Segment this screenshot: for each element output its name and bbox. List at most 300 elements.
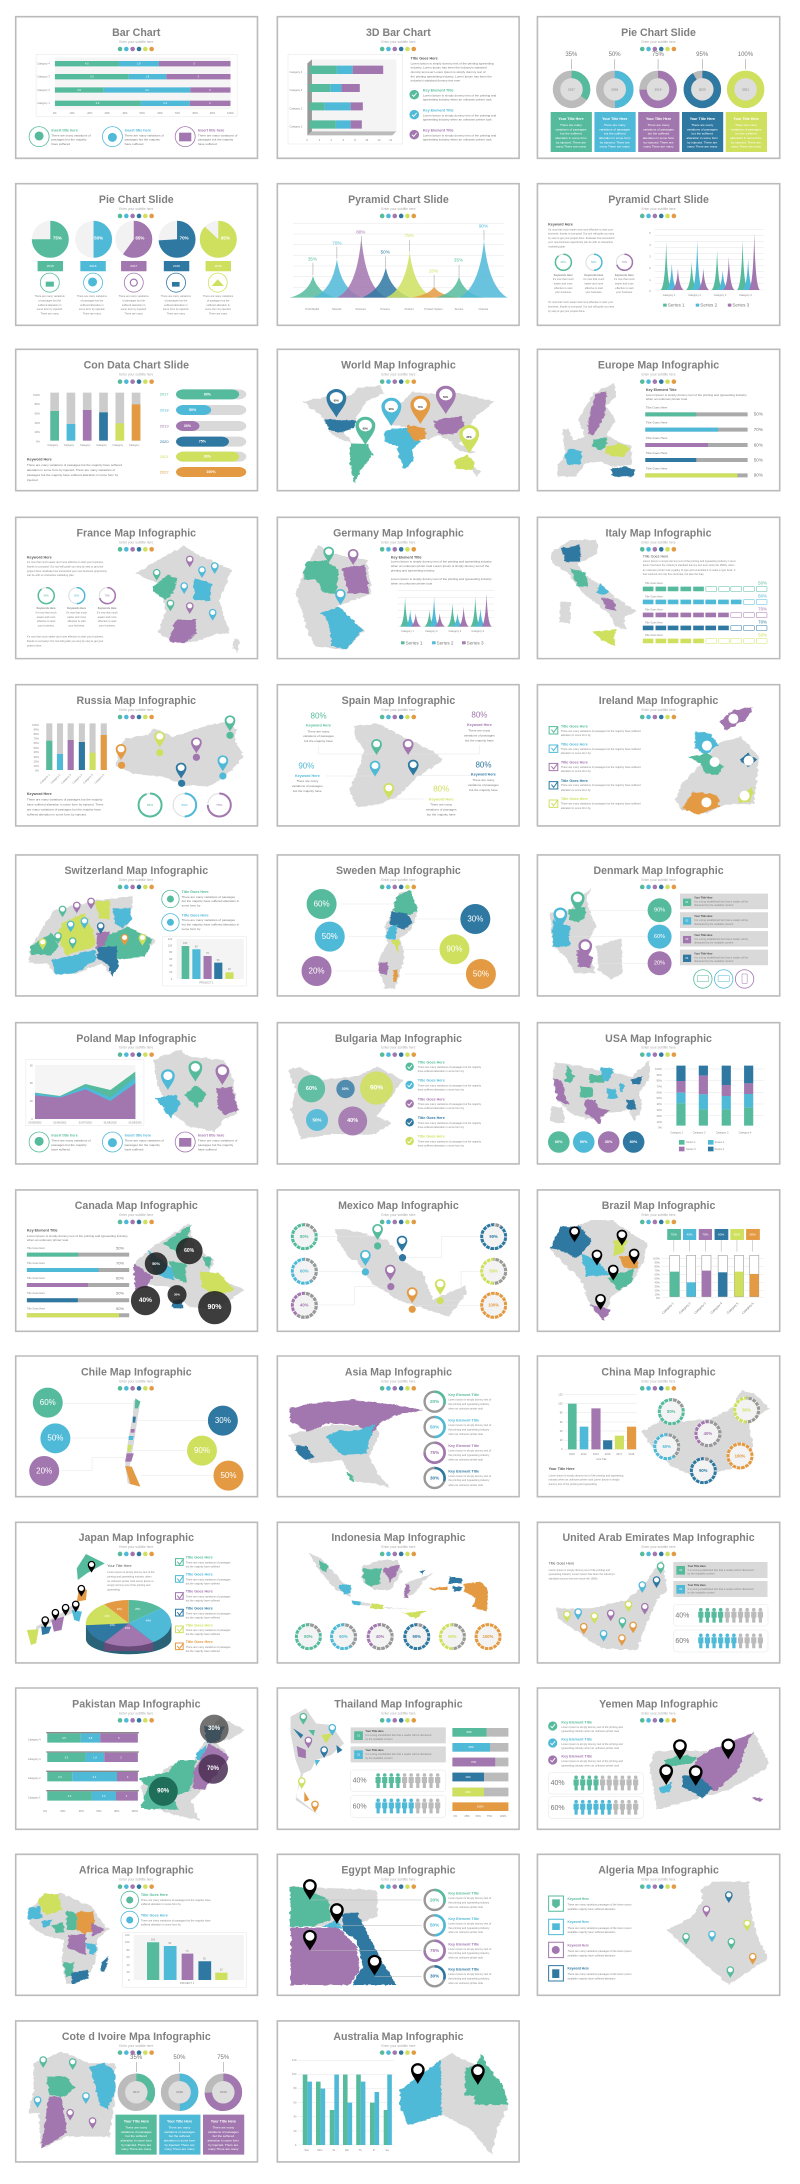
item 2 [549, 1919, 631, 1935]
ring 90%: effective to start [37, 619, 56, 623]
dark bubble 30%: 30% [174, 1293, 180, 1297]
title text: Title Goes Here [643, 554, 668, 558]
bubble 20% [648, 951, 672, 975]
stacked cylinders: 50% [657, 1096, 662, 1100]
column chart: 50% [34, 746, 39, 750]
poland map [153, 1049, 238, 1132]
check items: Title Goes Here [186, 1607, 213, 1611]
ring 90%: 90% [561, 260, 567, 264]
colour dots [380, 1718, 416, 1723]
ring 90%: 90% [489, 1234, 498, 1239]
title: Chile Map Infographic [81, 1366, 192, 1378]
cylinder chart: 20% [35, 430, 40, 434]
key element text: printing and typesetting industry [391, 569, 435, 573]
callout 90% blue: 90% [298, 761, 314, 770]
item 3: have suffered alteration in some form by [418, 1106, 465, 1110]
title text [643, 554, 736, 576]
donut 2019 [643, 52, 673, 104]
box 3: variations of passages [208, 2130, 239, 2134]
subtitle: Enter your subtitle here [119, 207, 154, 211]
black map pins [411, 2063, 485, 2085]
callout 90% blue: variations of passages [292, 784, 323, 788]
subtitle: Enter your subtitle here [381, 1545, 416, 1549]
legend [401, 640, 484, 645]
horizontal bars: 60% [468, 1745, 474, 1749]
ring 95% [139, 793, 162, 816]
people row 40%: 40% [353, 1778, 367, 1785]
ring 30%: Key Element Title [448, 1469, 479, 1473]
ring 20% [425, 1392, 491, 1412]
text block [107, 1564, 155, 1592]
box 4: many There are many [687, 145, 718, 149]
text block: industry's standard dummy text ever [411, 79, 460, 83]
ring 20%: 20% [430, 1897, 439, 1902]
box 3: alteration in some form [208, 2139, 239, 2143]
text block: the printing typesetting industry. Lorem Ipsum has been the [411, 74, 492, 78]
key element 1: typesetting industry when an unknown printer took [561, 1729, 620, 1733]
bar chart: Axis Title [596, 1457, 607, 1461]
ring 40% [696, 1422, 720, 1446]
subtitle: Enter your subtitle here [119, 1711, 154, 1715]
panel: Spain Map Infographic [277, 685, 519, 826]
feature 1: Insert title here [51, 1134, 78, 1138]
cylinder chart: 100% [33, 393, 40, 397]
ring 75%: the printing and typesetting industry [448, 1951, 490, 1955]
spike chart: 1 [649, 278, 651, 282]
column chart: 120 [125, 1933, 130, 1937]
pill bars: 2018 [160, 407, 169, 412]
bubble 40% [338, 1106, 367, 1135]
colour dots [640, 1884, 676, 1889]
box 5: many There are many [731, 145, 762, 149]
column chart: Fr [373, 2148, 375, 2152]
row 02: Your Title Here [365, 1748, 384, 1752]
3D stacked bars: 2 [127, 1775, 129, 1779]
ring 70%: easier and more [615, 282, 634, 286]
ring 60% [292, 1259, 316, 1283]
feature 2 [121, 1911, 211, 1929]
callout 80% navy: variations of passages [468, 783, 499, 787]
donut 2020: 2020 [699, 87, 706, 91]
subtitle: Enter your subtitle here [381, 1213, 416, 1217]
ring 50% [583, 254, 605, 294]
stacked bar chart: 80% [193, 111, 198, 115]
bubble 50%: 50% [47, 1434, 63, 1443]
item 1 [549, 1896, 631, 1911]
feature 1: suffered alteration in some form by [141, 1902, 182, 1906]
uae map [555, 1560, 667, 1650]
feature 1: passages but the majority [51, 1143, 87, 1147]
pill bars: 100% [206, 470, 216, 474]
segmented bars: 50% [758, 581, 767, 586]
3D pie chart: 40% [146, 1619, 152, 1623]
callout 80% teal: 80% [311, 711, 327, 720]
donut 2019 [208, 2055, 238, 2107]
keyword text: alteration in some form by injected. There are many variations of [27, 468, 115, 472]
canada map [134, 1223, 245, 1310]
closing text [27, 635, 104, 648]
column chart: PROJECT 1 [180, 1981, 195, 1985]
panel: World Map Infographic [277, 349, 519, 491]
column chart: 20 [294, 2129, 297, 2133]
3D bar chart: 6 [343, 138, 345, 142]
people row 40% [673, 1604, 768, 1626]
colour dots [118, 715, 154, 719]
asia map [288, 1400, 423, 1487]
ring 90%: easier and more [37, 615, 56, 619]
ring 80% [292, 1225, 316, 1249]
pill bars: 2019 [160, 423, 169, 428]
sweden map [377, 890, 418, 988]
progress bars: 60% [754, 442, 763, 447]
ring 100%: 100% [483, 1634, 494, 1639]
ring 50%: 50% [742, 1407, 751, 1412]
bar chart: 0 [561, 1447, 563, 1451]
subtitle: Enter your subtitle here [119, 1213, 154, 1217]
stacked bar chart: 0% [53, 111, 57, 115]
check items: Title Goes Here [186, 1623, 213, 1627]
ring 75% [208, 793, 231, 816]
russia map [115, 722, 244, 787]
spike chart: Category 1 [663, 293, 676, 297]
row 02 [673, 1581, 767, 1597]
3D stacked bars: 2 [126, 1794, 128, 1798]
progress bars: Title Goes Here [646, 421, 668, 425]
box 1: but the suffered [560, 132, 582, 136]
segmented bars: 70% [758, 620, 767, 625]
feature 1 [162, 890, 239, 908]
horizontal bars: 100% [500, 1814, 507, 1818]
ring 75%: 75% [430, 1450, 439, 1455]
3D stacked bars: 2.4 [102, 1794, 106, 1798]
feature 2: Title Goes Here [141, 1913, 168, 1917]
people row 40% [351, 1770, 446, 1792]
callout 80% navy: Keyword Here [471, 773, 496, 777]
stacked bar chart: Category 4 [37, 62, 50, 66]
colour dots [380, 47, 416, 51]
ring 30%: 30% [430, 1974, 439, 1979]
colour dots [118, 1386, 154, 1391]
segmented bars: Title Goes Here [645, 621, 663, 625]
item 1: There are many variations passages of the lorem ipsum [567, 1903, 631, 1907]
key element 1: Key Element Title [561, 1720, 592, 1724]
ring 50% [440, 1625, 464, 1649]
column chart: 10% [34, 764, 39, 768]
stacked bar chart: Category 2 [37, 88, 50, 92]
map pins: 90% [389, 407, 394, 411]
item 3 [549, 1942, 631, 1958]
italy map [550, 540, 637, 646]
bubble 50% [315, 922, 345, 952]
subtitle: Enter your subtitle here [119, 1545, 154, 1549]
ring 30%: Key Element Title [448, 1968, 479, 1972]
bubble 70% [198, 1754, 228, 1784]
bubble 60%: 60% [654, 934, 665, 940]
colour dots [380, 547, 416, 552]
ring 70%: effective to start [98, 619, 117, 623]
ring 50% [425, 1915, 491, 1935]
title: United Arab Emirates Map Infographic [562, 1532, 755, 1544]
panel: Pie Chart Slide donuts [537, 17, 780, 158]
cylinder chart: Category 3 [693, 1301, 707, 1315]
ring 30%: Lorem Ipsum is simply dummy text of [448, 1972, 491, 1976]
map pins: 50% [443, 395, 449, 399]
bubble 30% [336, 1080, 355, 1098]
captions: There are many variations [203, 294, 234, 298]
callout 80% navy: There are many [472, 778, 495, 782]
item 1 [405, 1060, 482, 1073]
column chart: 60 [127, 1955, 130, 1959]
feature 2 [102, 1132, 164, 1152]
keyword text: There are many variations of passages but the majority have suffered [27, 463, 122, 467]
cylinder chart: 10% [655, 1293, 660, 1297]
key element text: Lorem Ipsum is simply dummy text of the printing and typesetting industry [391, 560, 492, 564]
row 01: Your Title Here [365, 1729, 384, 1733]
usa map [550, 1061, 649, 1125]
ring 75%: Key Element Title [448, 1444, 479, 1448]
spike chart: 0 [649, 289, 651, 293]
pie 2019: 2019 [215, 264, 222, 268]
row 02: by the readable content [688, 1591, 715, 1595]
ring 40% [292, 1293, 316, 1317]
ring 50%: 50% [74, 594, 80, 598]
donut 2019: 2019 [220, 2090, 227, 2094]
check items: but the majority have suffered [186, 1616, 220, 1620]
stacked cylinders: 80% [657, 1079, 662, 1083]
callout 80% lime: 80% [433, 785, 449, 794]
subtitle: Enter your subtitle here [381, 207, 416, 211]
title: Switzerland Map Infographic [64, 865, 208, 877]
row 03: It is a long established fact that a reader will be [694, 937, 749, 941]
colour dots [380, 1884, 416, 1889]
progress bars: Title Goes Here [27, 1307, 46, 1311]
box 4 [682, 112, 723, 152]
donut 2017: 35% [130, 2055, 143, 2061]
captions: of passages but the [165, 299, 188, 303]
stacked cylinders: 20% [657, 1114, 662, 1118]
panel: Cote d Ivoire Mpa Infographic [16, 2021, 257, 2162]
colour dots [118, 547, 154, 552]
africa map [27, 1893, 110, 1984]
bubble 50%: 50% [580, 1140, 588, 1144]
check items: There are many variations of passages [186, 1578, 231, 1582]
callout 90% blue [292, 761, 323, 793]
3D stacked bars: 20% [60, 1809, 66, 1813]
feature 1: have suffered [51, 1147, 70, 1151]
progress bars: Title Goes Here [27, 1291, 46, 1295]
item 1: have suffered alteration in some form by [418, 1069, 465, 1073]
item 4: alteration in some form by [561, 788, 591, 792]
cylinder chart: 50% [655, 1277, 660, 1281]
europe map [558, 383, 637, 477]
box 3: by injected. There are [644, 140, 674, 144]
3D stacked bars: 100% [131, 1809, 139, 1813]
ring 50%: your business. [68, 624, 85, 628]
pyramid chart: 75% [405, 233, 414, 238]
stacked bar chart: 3 [198, 75, 200, 79]
pill bars: 90% [204, 455, 212, 459]
ring 50%: the printing and typesetting industry [448, 1428, 490, 1432]
key element text: when an unknown printer took [391, 582, 433, 586]
bubble 90%: 90% [157, 1789, 170, 1795]
germany map [296, 545, 372, 650]
bubble 50% orange: 50% [220, 1471, 236, 1480]
captions: There are many variations [161, 294, 192, 298]
box 2: Your Title Here [167, 2120, 192, 2124]
legend: Series 2 [700, 303, 718, 308]
box 1: variations of passages [121, 2130, 152, 2134]
ring 75%: the printing and typesetting industry [448, 1453, 490, 1457]
donut 2018 [600, 52, 630, 104]
panel: Russia Map Infographic [16, 685, 257, 826]
check items: Title Goes Here [186, 1556, 213, 1560]
dark bubble 90% [198, 1291, 231, 1324]
stacked bar chart: 4.3 [96, 101, 100, 105]
callout 80% purple: 80% [471, 711, 487, 720]
keyword text: passages but the majority have suffered alteration in some form by [27, 473, 119, 477]
ring 60% [655, 1435, 679, 1459]
subtitle: Enter your subtitle here [641, 373, 676, 377]
3D bar chart: Category 2 [290, 107, 303, 111]
text block: typesetting industry. Lorem Ipsum has been the industry's [549, 1572, 615, 1576]
feature: insert title 2: Insert title here [125, 128, 151, 132]
pie 2017 [115, 221, 152, 292]
box 1: by injected. There are [121, 2143, 151, 2147]
cylinder chart: 20% [655, 1289, 660, 1293]
3D bar chart: Category 3 [290, 88, 303, 92]
item 1: There are many variations of passages but the majority [418, 1065, 482, 1069]
ring 50%: when an unknown printer took [448, 1432, 484, 1436]
subtitle: Enter your subtitle here [381, 1711, 416, 1715]
cylinder chart: 0% [36, 440, 40, 444]
donut 2019: 75% [652, 52, 665, 58]
key element 2: typesetting industry when an unknown printer took [423, 118, 492, 122]
pie 2019 [200, 221, 237, 292]
title: USA Map Infographic [605, 1033, 712, 1045]
panel: Bulgaria Map Infographic [277, 1023, 519, 1164]
title: Bar Chart [112, 27, 161, 39]
3D bar chart [288, 54, 403, 144]
colour dots [118, 1884, 154, 1889]
map pins [34, 2056, 96, 2129]
pyramid chart: Process [380, 307, 390, 311]
ring 50%: when an unknown printer took [448, 1930, 484, 1934]
spike chart: Category 3 [448, 629, 462, 633]
cylinder chart: 40% [35, 421, 40, 425]
segmented bars: Title Goes Here [645, 608, 663, 612]
column chart: 0% [35, 769, 39, 773]
spain map [349, 723, 443, 807]
ring 40%: 40% [300, 1303, 309, 1308]
colour dots [640, 547, 676, 552]
box 3: many There are many [643, 145, 674, 149]
column chart: 40% [34, 750, 39, 754]
key element 2: Lorem Ipsum is simply dummy text of the printing and [561, 1742, 623, 1746]
pill bars: 90% [204, 392, 212, 396]
item 3: alteration in some form by [561, 769, 591, 773]
ring 75% [425, 1941, 491, 1961]
spike chart [649, 229, 764, 297]
cylinder chart: 70% [655, 1269, 660, 1273]
closing text: It's now that much easier and more effective to start your business, [27, 635, 104, 639]
item 2: Title Goes Here [561, 742, 588, 746]
callout 90% blue: There are many [296, 779, 319, 783]
colour dots [380, 214, 416, 218]
progress bars [645, 406, 763, 478]
colour dots [640, 214, 676, 218]
feature 1: There are many variations of passages but the majority have [141, 1898, 211, 1902]
pyramid chart: Structure [355, 307, 366, 311]
bubble 50% [306, 1109, 328, 1131]
panel: Pyramid Chart Slide with text [537, 184, 780, 325]
callout 80% purple: Keyword Here [467, 723, 492, 727]
3D stacked bars [28, 1732, 139, 1813]
key element 3 [548, 1755, 623, 1768]
bubble 50% [573, 1131, 595, 1153]
key element 3: Key Element Title [423, 128, 454, 132]
text block: typesetting [107, 1588, 120, 1592]
item 2: There are many variations of passages but the majority [418, 1084, 482, 1088]
keyword text: It's now that much easier and more effective to start your business, [27, 560, 104, 564]
stacked bar chart: 100% [227, 111, 234, 115]
item 5: alteration in some form by [561, 806, 591, 810]
check items: Title Goes Here [186, 1590, 213, 1594]
ring 90%: 90% [43, 594, 49, 598]
stacked bar chart: Category 3 [37, 75, 50, 79]
item 4: There are many variations passages of the lorem ipsum [567, 1972, 631, 1976]
3D stacked bars: 60% [96, 1809, 102, 1813]
callout 90% blue: but the majority have [293, 789, 322, 793]
captions: suffered alteration in [38, 303, 62, 307]
world map [303, 385, 494, 483]
column chart: Tu [332, 2148, 336, 2152]
area chart [26, 1059, 144, 1125]
colour dots [640, 1386, 676, 1391]
ring 40%: 40% [376, 1634, 385, 1639]
bar chart: 100 [558, 1402, 563, 1406]
title: Africa Map Infographic [79, 1865, 194, 1877]
column chart: Category 3 [60, 772, 72, 785]
text block: dummy text of the printing and typesetting [549, 1482, 597, 1486]
title: Russia Map Infographic [77, 695, 196, 707]
bar chart: 120 [558, 1393, 563, 1397]
spike chart [397, 591, 494, 633]
ring 70% [614, 254, 635, 294]
progress bars: 70% [754, 427, 763, 432]
black map pins [303, 1879, 381, 1976]
stacked bar chart: 5 [193, 62, 195, 66]
3D pie chart: 20% [125, 1626, 131, 1630]
pyramid chart: Channel [479, 307, 489, 311]
title: Cote d Ivoire Mpa Infographic [62, 2031, 211, 2043]
3D pie chart [86, 1600, 171, 1654]
panel: Canada Map Infographic [16, 1190, 257, 1331]
ring 75%: Lorem Ipsum is simply dummy text of [448, 1947, 491, 1951]
ring 30%: 30% [430, 1475, 439, 1480]
key element 2 [409, 108, 496, 122]
panel: Mexico Map Infographic [277, 1190, 519, 1331]
ring 70%: 70% [105, 594, 110, 598]
colour dots [380, 2050, 416, 2055]
colour dots [380, 1220, 416, 1224]
colour dots [640, 379, 676, 384]
callout 80% lime: There are many [430, 803, 452, 807]
column chart [123, 1933, 246, 1987]
pyramid chart: 20% [429, 268, 438, 273]
column chart: Category 4 [71, 772, 84, 785]
keyword text: marketing plan. [548, 245, 566, 249]
percent boxes: 60% [734, 1233, 740, 1237]
